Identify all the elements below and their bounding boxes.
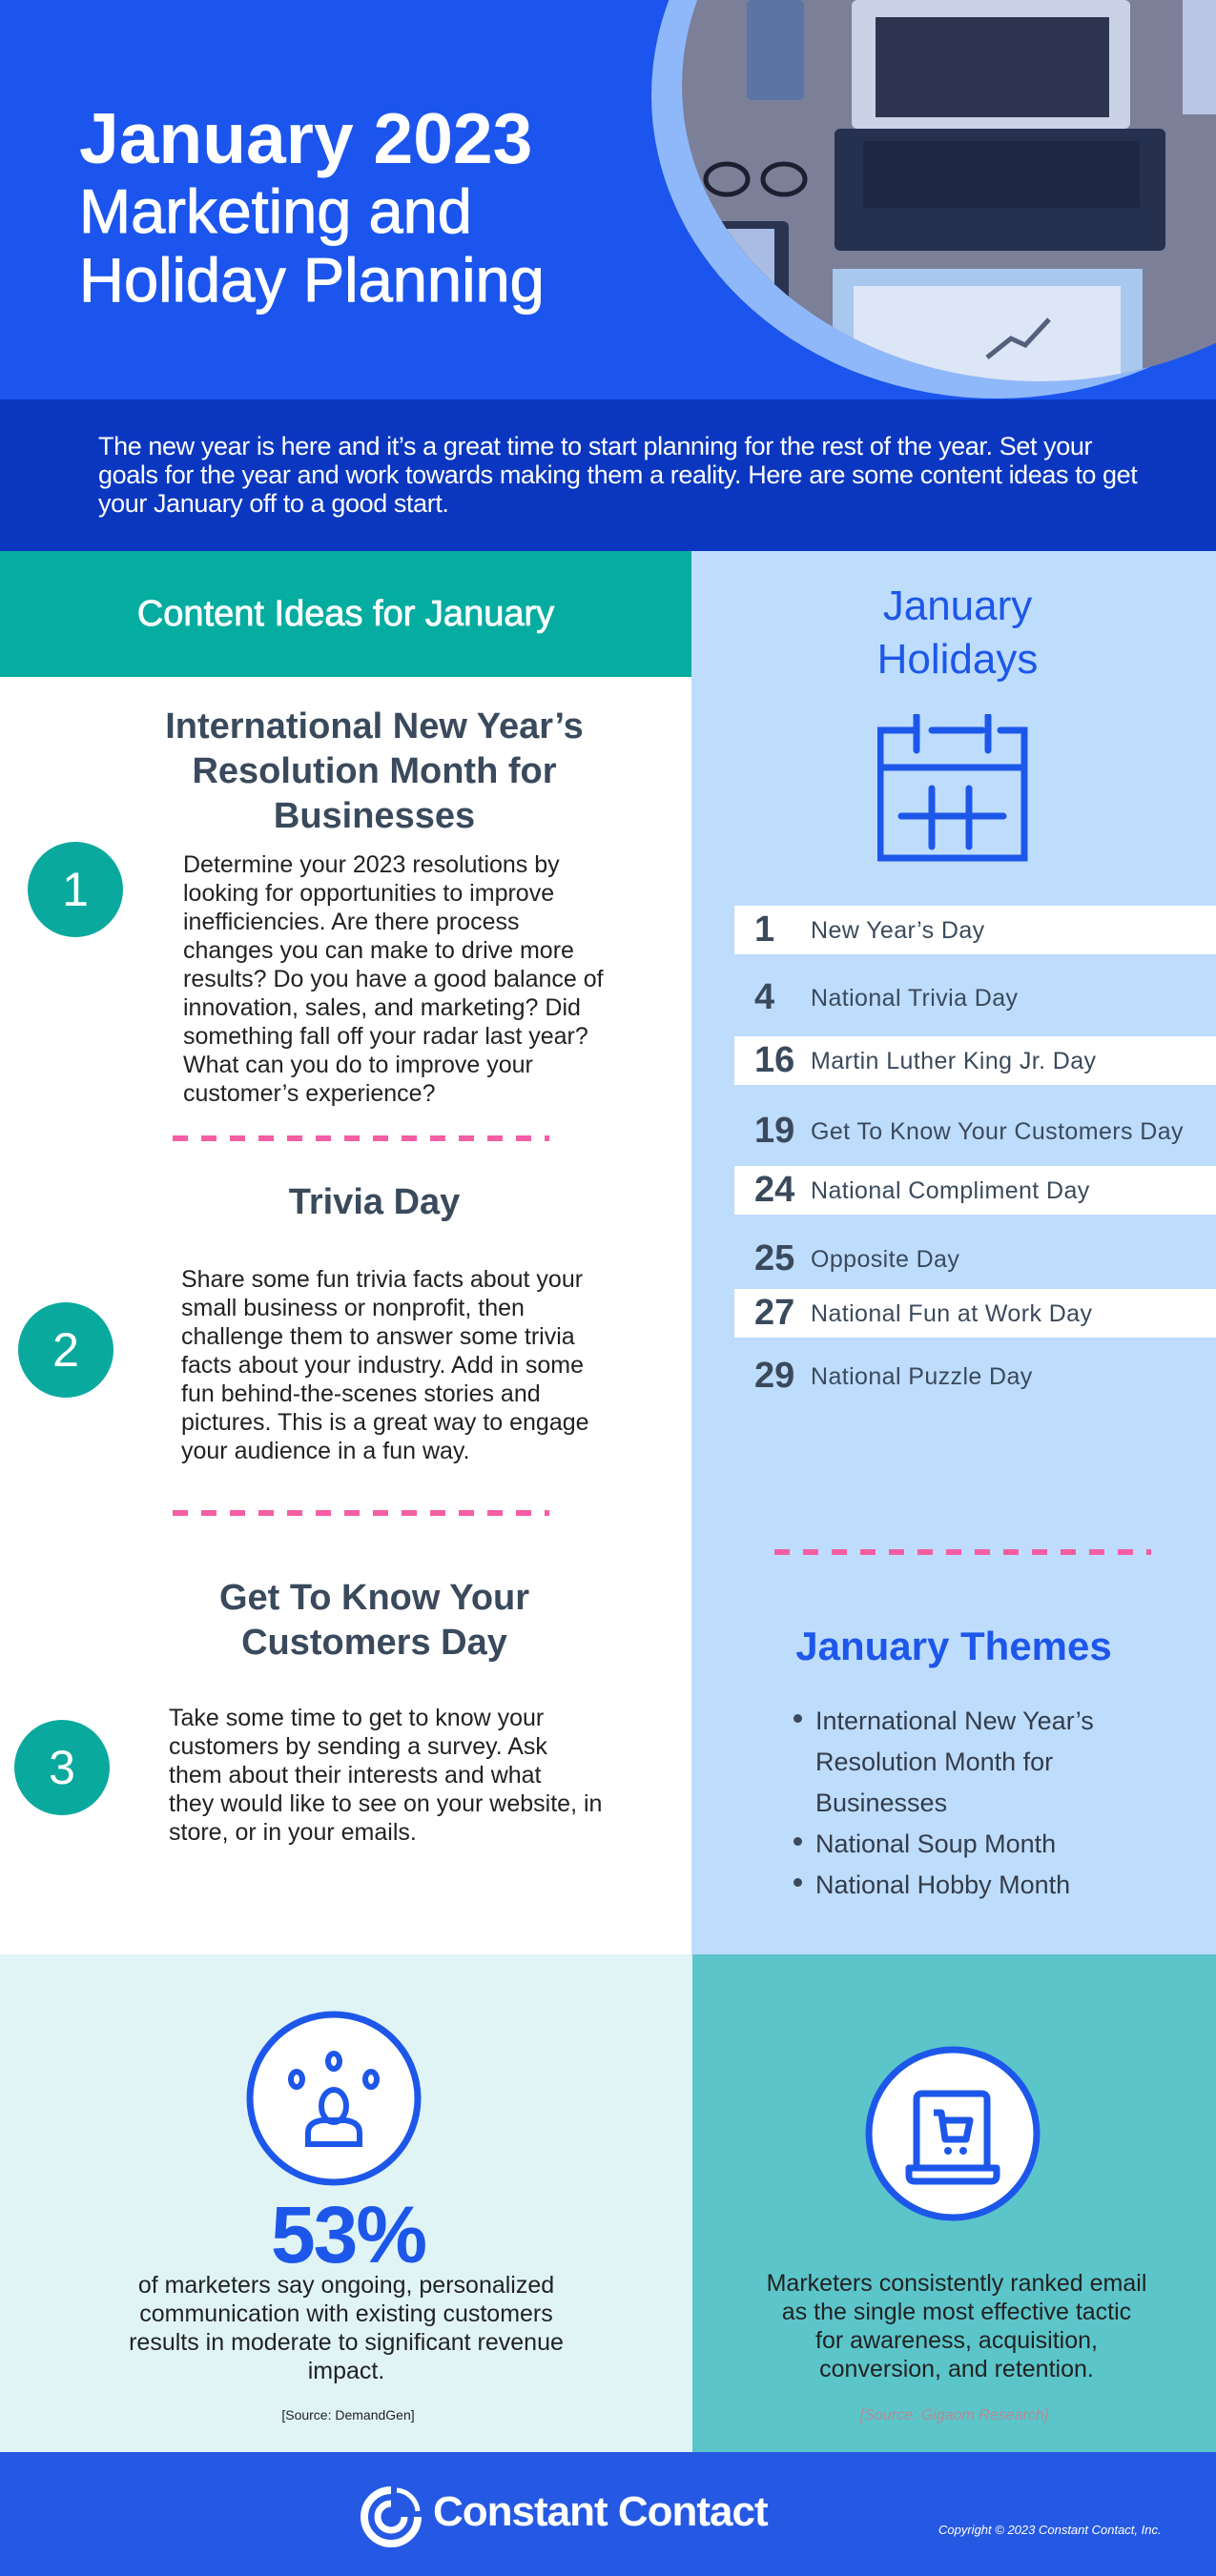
holiday 25: 25	[754, 1238, 794, 1278]
holiday 25: Opposite Day	[811, 1246, 959, 1273]
email text: Marketers consistently ranked email	[767, 2270, 1146, 2297]
logo: Constant Contact	[433, 2488, 768, 2535]
53%: 53%	[271, 2190, 425, 2280]
icon: person network	[246, 2012, 422, 2185]
holiday 1: New Year’s Day	[811, 917, 985, 944]
header banner	[0, 0, 1216, 399]
idea 1 heading	[165, 706, 584, 836]
idea 1 number	[28, 842, 123, 937]
footer	[0, 2452, 1216, 2576]
panel: email stat	[692, 1954, 1216, 2452]
holiday 24: 24	[754, 1170, 794, 1210]
themes list: Resolution Month for	[815, 1748, 1053, 1776]
holiday 16: Martin Luther King Jr. Day	[811, 1048, 1096, 1074]
panel: january holidays	[691, 551, 1216, 1954]
stat text	[129, 2272, 564, 2384]
stat text: of marketers say ongoing, personalized	[138, 2272, 554, 2299]
idea 3 text: Take some time to get to know your customers by sending a survey. Ask them about their interests and what they would like to see on your website, in store, or in your emails.	[169, 1705, 602, 1846]
holiday 27: National Fun at Work Day	[811, 1300, 1092, 1327]
idea 1 heading: Resolution Month for	[192, 751, 557, 791]
holiday 16: 16	[754, 1040, 794, 1080]
idea 1 text: Determine your 2023 resolutions by looking for opportunities to improve inefficiencies. Are there process changes you can make to drive more results? Do you have a good balance of innovation, sales, and marketing? Did something fall off your radar last year? What can you do to improve your customer’s experience?	[183, 851, 604, 1107]
holiday 27	[734, 1289, 1216, 1338]
holiday 29: 29	[754, 1356, 794, 1396]
intro band	[0, 399, 1216, 551]
content ideas header: Content Ideas for January	[137, 594, 554, 634]
title	[79, 98, 545, 315]
source: [Source: Gigaom Research]	[860, 2407, 1048, 2423]
idea 3 heading: Get To Know Your	[219, 1578, 529, 1618]
holidays heading: January	[883, 583, 1032, 629]
title: Marketing and	[79, 176, 472, 246]
idea 3 heading	[219, 1578, 529, 1663]
idea 3 heading: Customers Day	[241, 1623, 507, 1663]
holiday 4: National Trivia Day	[811, 985, 1018, 1012]
themes heading: January Themes	[795, 1624, 1112, 1668]
holidays heading: Holidays	[877, 636, 1038, 683]
content ideas header	[0, 551, 691, 677]
holiday list	[734, 906, 1216, 1396]
email text: as the single most effective tactic	[782, 2299, 1131, 2325]
holiday 19: 19	[754, 1111, 794, 1151]
holiday 27: 27	[754, 1293, 794, 1333]
themes list: Businesses	[815, 1789, 947, 1817]
idea 1 heading: International New Year’s	[165, 706, 584, 746]
icon: calendar	[877, 714, 1028, 862]
holiday 24	[734, 1166, 1216, 1215]
header photo ellipse	[651, 0, 1216, 399]
intro text: The new year is here and it’s a great time to start planning for the rest of the year. Set your goals for the year and work towards making them a reality. Here are some content ideas to get your January off to a good start.	[98, 432, 1137, 518]
stat text: results in moderate to significant revenue	[129, 2329, 564, 2356]
holiday 29	[754, 1356, 1033, 1396]
holiday 25	[754, 1238, 959, 1278]
title: January 2023	[79, 98, 532, 178]
title: Holiday Planning	[79, 245, 545, 315]
idea 2 number: 2	[52, 1323, 79, 1377]
holiday 29: National Puzzle Day	[811, 1363, 1033, 1390]
holiday 16	[734, 1036, 1216, 1085]
idea 2 heading: Trivia Day	[289, 1182, 460, 1222]
email text: for awareness, acquisition,	[815, 2327, 1098, 2354]
holiday 1	[734, 906, 1216, 954]
holiday 19	[754, 1111, 1184, 1151]
holiday 1: 1	[754, 910, 774, 950]
copyright: Copyright © 2023 Constant Contact, Inc.	[938, 2523, 1162, 2537]
holiday 24: National Compliment Day	[811, 1177, 1090, 1204]
panel: content ideas	[0, 551, 691, 1954]
email text	[767, 2270, 1146, 2382]
source: [Source: DemandGen]	[281, 2407, 415, 2423]
themes list: National Hobby Month	[815, 1871, 1070, 1899]
panel: stat 53%	[0, 1954, 692, 2452]
icon: laptop cart	[866, 2046, 1040, 2221]
email text: conversion, and retention.	[819, 2356, 1094, 2382]
idea 1 heading: Businesses	[274, 796, 475, 836]
idea 2 text: Share some fun trivia facts about your small business or nonprofit, then challenge them to answer some trivia facts about your industry. Add in some fun behind-the-scenes stories and pictures. This is a great way to engage your audience in a fun way.	[181, 1266, 589, 1464]
idea 3 number: 3	[49, 1741, 75, 1794]
holiday 4	[754, 977, 1018, 1017]
holiday 19: Get To Know Your Customers Day	[811, 1118, 1184, 1145]
logo	[361, 2486, 769, 2547]
idea 3 number	[14, 1720, 110, 1815]
themes list	[793, 1707, 1094, 1899]
stat text: communication with existing customers	[139, 2300, 553, 2327]
holiday 4: 4	[754, 977, 774, 1017]
themes list: International New Year’s	[815, 1707, 1094, 1735]
idea 2 number	[18, 1302, 113, 1398]
themes list: National Soup Month	[815, 1830, 1056, 1858]
holidays heading	[877, 583, 1038, 683]
stat text: impact.	[308, 2358, 384, 2384]
idea 1 number: 1	[62, 863, 89, 916]
